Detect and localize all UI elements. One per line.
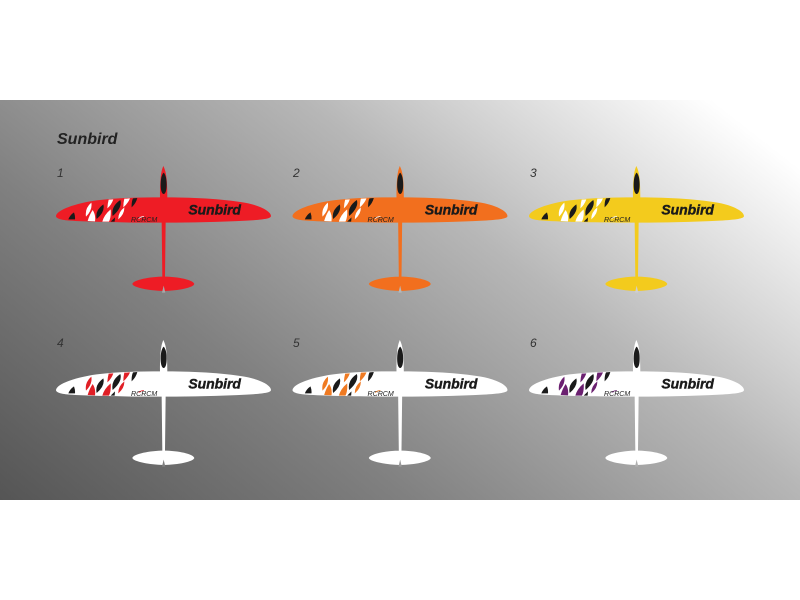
glider 2: orange [292,166,507,293]
background panel [0,100,800,500]
glider 4: white and red: RCRCM [131,389,158,398]
glider 2: orange: Sunbird [425,201,478,217]
glider 2: orange: RCRCM [367,215,395,224]
number 4: 4 [57,336,64,350]
glider 3: yellow: Sunbird [661,201,714,217]
glider 6: white and purple: Sunbird [661,375,714,391]
glider 3: yellow: RCRCM [604,215,631,224]
number 3: 3 [530,166,537,180]
glider 5: white and orange [292,340,507,467]
number 6: 6 [530,336,537,350]
title: Sunbird [57,131,119,148]
glider 4: white and red: Sunbird [188,375,241,391]
glider 1: red: Sunbird [188,201,241,217]
glider 4: white and red [56,340,271,467]
glider 3: yellow [529,166,744,293]
number 5: 5 [293,336,300,350]
glider 1: red: RCRCM [131,215,158,224]
glider 6: white and purple [529,340,744,467]
glider 6: white and purple: RCRCM [604,389,631,398]
glider 5: white and orange: Sunbird [425,375,478,391]
number 1: 1 [57,166,64,180]
glider 5: white and orange: RCRCM [367,389,395,398]
number 2: 2 [292,166,300,180]
glider 1: red [56,166,271,293]
